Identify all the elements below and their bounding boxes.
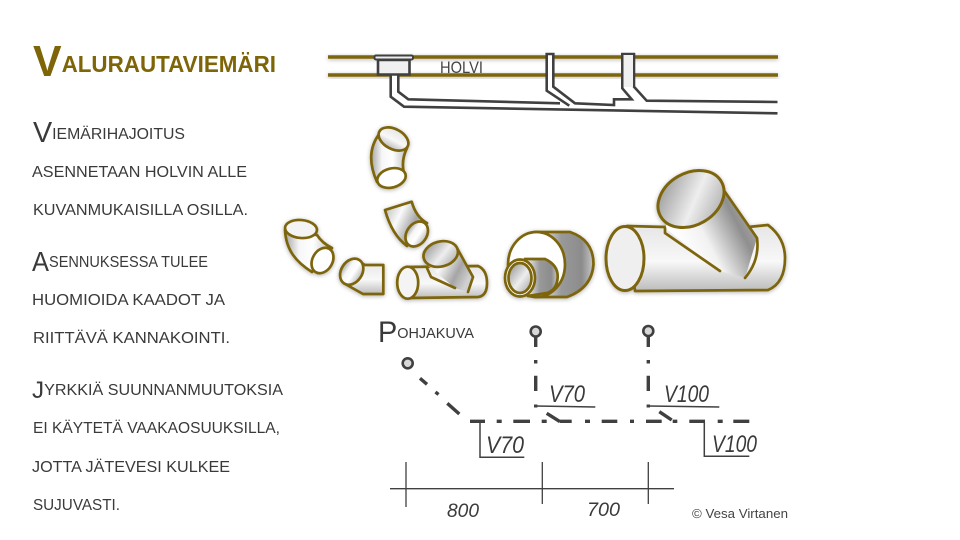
- text block: paragraphs: HUOMIOIDA KAADOT JA: [32, 292, 225, 309]
- pipe labels: V70: [549, 381, 586, 408]
- fitting: reducer: [505, 232, 594, 297]
- leader lines: [480, 406, 749, 457]
- text block: paragraphs: [32, 117, 283, 514]
- main pipe: [391, 54, 778, 113]
- dash-dot pipe lines: [420, 337, 749, 422]
- text block: paragraphs: A: [32, 246, 49, 277]
- text block: paragraphs: SENNUKSESSA TULEE: [49, 254, 208, 271]
- dimension labels: 700: [587, 500, 620, 521]
- label: Pohjakuva: P: [378, 316, 397, 349]
- fitting: short bend: [335, 254, 383, 294]
- slab lines: [328, 57, 778, 75]
- copyright: © Vesa Virtanen: [692, 506, 788, 521]
- text block: paragraphs: YRKKIÄ SUUNNANMUUTOKSIA: [44, 381, 283, 399]
- fitting: small branch: [397, 237, 487, 299]
- dimension labels: [447, 500, 620, 522]
- text block: paragraphs: ASENNETAAN HOLVIN ALLE: [32, 164, 247, 181]
- drain symbols: [403, 326, 653, 368]
- fitting: middle bend: [385, 202, 433, 251]
- title: ALURAUTAVIEMÄRI: [62, 51, 276, 77]
- plan drawing: [378, 316, 758, 522]
- floor drain: [378, 60, 410, 74]
- text block: paragraphs: J: [32, 377, 44, 404]
- pipe labels: V100: [712, 431, 758, 458]
- text block: paragraphs: V: [33, 117, 53, 149]
- pipe labels: V100: [664, 381, 710, 408]
- section drawing: slab with pipes: [328, 54, 778, 113]
- fitting: left elbow: [284, 219, 338, 277]
- pipe labels: [486, 381, 758, 459]
- title: V: [33, 37, 62, 86]
- text block: paragraphs: EI KÄYTETÄ VAAKAOSUUKSILLA,: [33, 419, 280, 437]
- fitting: large branch: [606, 159, 785, 291]
- fittings: [284, 123, 785, 299]
- label: HOLVI: HOLVI: [440, 58, 483, 77]
- dimension labels: 800: [447, 501, 479, 522]
- text block: paragraphs: SUJUVASTI.: [33, 497, 120, 514]
- dimension line: [390, 462, 674, 507]
- text block: paragraphs: JOTTA JÄTEVESI KULKEE: [32, 458, 230, 476]
- text block: paragraphs: KUVANMUKAISILLA OSILLA.: [33, 202, 248, 219]
- fitting: top elbow: [371, 123, 412, 191]
- text block: paragraphs: RIITTÄVÄ KANNAKOINTI.: [33, 329, 230, 347]
- label: Pohjakuva: OHJAKUVA: [397, 325, 474, 342]
- text block: paragraphs: IEMÄRIHAJOITUS: [52, 125, 185, 143]
- pipe labels: V70: [486, 432, 525, 459]
